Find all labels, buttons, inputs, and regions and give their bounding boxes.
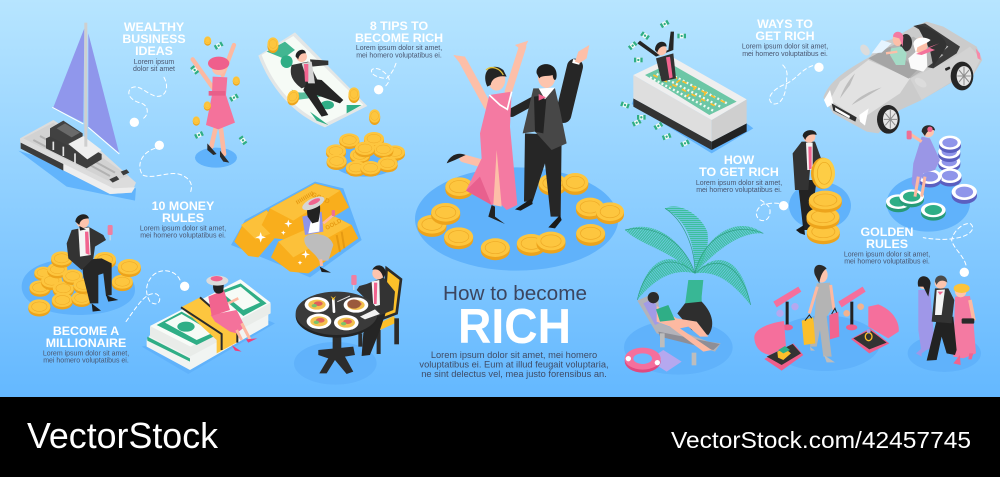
illustration: money stack with woman [142, 276, 275, 374]
seated woman [206, 276, 257, 352]
dashed connector: 8 tips [371, 63, 396, 94]
text block: wealthy business ideas: BUSINESS [122, 32, 186, 46]
dashed connector: golden rules [923, 223, 973, 277]
right stand [838, 287, 866, 330]
text block: how to get rich [696, 153, 782, 194]
dashed connector: wealthy business ideas [129, 77, 167, 127]
text block: how to get rich: TO GET RICH [699, 165, 779, 179]
chair [358, 268, 401, 354]
dashed connector: how to get rich [756, 198, 788, 221]
title [443, 283, 587, 354]
illustration: central couple on coins [415, 41, 624, 271]
man [927, 276, 957, 361]
right bar: GOLD [325, 218, 343, 232]
text block: 10 money rules: Lorem ipsum dolor sit amet, [140, 226, 226, 232]
illustration: man dining at table [294, 265, 401, 385]
text block: 8 tips to become rich: BECOME RICH [355, 31, 443, 45]
text block: wealthy business ideas: WEALTHY [124, 20, 185, 34]
title: RICH [458, 300, 571, 354]
text block: intro: Lorem ipsum dolor sit amet, mei homero [431, 350, 597, 360]
swim ring and towel [625, 348, 682, 373]
illustration: woman on casino chips [886, 125, 977, 232]
text block: intro [419, 350, 609, 379]
text block: wealthy business ideas: Lorem ipsum [134, 59, 174, 66]
illustration: man sitting on coins [22, 214, 141, 317]
text block: 10 money rules: RULES [162, 211, 204, 225]
text block: ways to get rich: WAYS TO [757, 17, 813, 31]
text block: 8 tips to become rich: mei homero voluptatibus ei. [356, 52, 442, 60]
dashed connector: 10 money rules [140, 141, 191, 194]
shopper [802, 265, 839, 362]
text block: 10 money rules: mei homero voluptatibus ei. [140, 232, 226, 240]
text block: how to get rich: Lorem ipsum dolor sit amet, [696, 180, 782, 187]
text block: become a millionaire: Lorem ipsum dolor sit amet, [43, 350, 129, 358]
text block: ways to get rich: mei homero voluptatibus ei. [742, 51, 828, 58]
footer bar [0, 397, 1000, 477]
footer logo text: VectorStock [27, 415, 219, 456]
palm fronds [625, 206, 763, 305]
illustration: palm and sunbather [624, 206, 763, 375]
illustration: man in bathtub of money [620, 20, 753, 153]
text block: golden rules: RULES [866, 237, 908, 251]
illustration: jewellery shop [754, 265, 899, 371]
illustration: gold coin pile top [326, 132, 405, 177]
text block: 10 money rules [140, 199, 226, 240]
woman [447, 41, 528, 224]
illustration: trio in formalwear [908, 276, 981, 372]
text block: golden rules: GOLDEN [860, 225, 914, 239]
car wheels [877, 62, 973, 134]
table [296, 292, 380, 374]
jewellery box with ring [851, 304, 899, 353]
left stand [773, 287, 801, 330]
text block: golden rules [844, 225, 930, 266]
man [351, 265, 395, 356]
seated woman [300, 194, 335, 273]
text block: 8 tips to become rich: 8 TIPS TO [370, 19, 429, 33]
text block: become a millionaire: mei homero voluptatibus ei. [43, 358, 129, 364]
illustration: gold bars with seated woman [231, 182, 362, 277]
illustration: convertible car [823, 22, 982, 134]
yacht sails [52, 23, 119, 154]
jewellery box with emerald [754, 321, 803, 371]
illustration: yacht [18, 23, 136, 201]
text block: golden rules: mei homero voluptatibus ei. [844, 258, 930, 266]
illustration: woman in pink dress with flying money [190, 36, 247, 168]
text block: ways to get rich [742, 17, 828, 58]
text block: how to get rich: HOW [724, 153, 754, 167]
lounger and sunbather [637, 292, 721, 365]
text block: become a millionaire: BECOME A [53, 324, 119, 338]
text block: become a millionaire: MILLIONAIRE [46, 336, 126, 350]
text block: 10 money rules: 10 MONEY [152, 199, 215, 213]
text block: how to get rich: mei homero voluptatibus ei. [696, 187, 782, 194]
top bar: GOLD [310, 191, 331, 206]
text block: wealthy business ideas: dolor sit amet [133, 66, 175, 73]
text block: 8 tips to become rich [355, 19, 443, 60]
text block: wealthy business ideas [122, 20, 186, 73]
text block: ways to get rich: GET RICH [755, 29, 815, 43]
man [512, 45, 589, 228]
title: How to become [443, 283, 587, 305]
text block: intro: voluptatibus ei. Eum at illud feugait voluptaria, [419, 360, 609, 370]
man [67, 214, 118, 312]
text block: ways to get rich: Lorem ipsum dolor sit amet, [742, 44, 828, 50]
right woman [953, 284, 976, 365]
car passengers [886, 32, 939, 72]
car seats and interior [890, 23, 960, 78]
dashed connector: ways to get rich [770, 63, 824, 104]
illustration: man on banknote [258, 32, 380, 127]
footer image id: VectorStock.com/42457745 [671, 427, 971, 453]
left bar [234, 210, 282, 257]
text block: 8 tips to become rich: Lorem ipsum dolor sit amet, [356, 45, 442, 52]
text block: become a millionaire [43, 324, 129, 364]
text block: wealthy business ideas: IDEAS [135, 44, 173, 58]
text block: golden rules: Lorem ipsum dolor sit amet, [844, 252, 930, 258]
illustration: man with gold coin stack [789, 130, 851, 244]
dashed connector: become a millionaire [126, 271, 189, 322]
left woman [916, 276, 935, 357]
text block: intro: ne sint delectus vel, mea justo forensibus an. [421, 369, 607, 379]
